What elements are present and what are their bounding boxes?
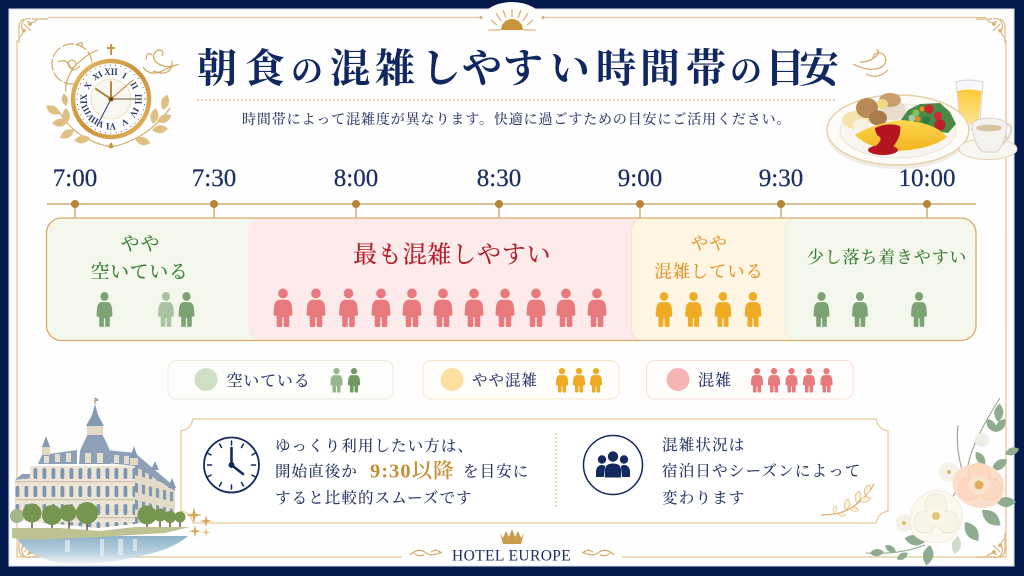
note text: 宿泊日やシーズンによって [662,461,862,480]
legend: crowded [646,360,853,399]
clock numerals [79,67,143,131]
clock numerals: II [128,80,141,91]
advice text: 9:30以降 [370,460,455,482]
building main facade [15,466,135,528]
omelette [855,120,947,151]
clock illustration [44,43,179,148]
callout panel [181,419,888,523]
segment: most crowded [248,218,668,340]
label: slightly empty: やや [120,234,161,255]
title [197,46,839,91]
icon: clock [204,438,259,492]
label: slightly empty [90,234,189,283]
label: slightly crowded: やや [691,234,728,254]
timeline labels: 8:00 [334,165,378,192]
timeline labels: 7:00 [53,165,97,192]
title: の [730,53,762,89]
floral corner [866,398,1021,566]
hotel illustration [10,398,212,564]
title: 朝食 [197,46,285,91]
legend: somewhat crowded [423,360,619,399]
advice text: を目安に [463,462,529,480]
peach rose [953,463,1004,508]
clock numerals: IX [79,94,89,104]
advice text: 開始直後か [275,462,358,480]
title: 混雑しやすい時間帯 [330,46,726,91]
clock numerals: VI [106,121,116,131]
central tower and spire [42,398,176,488]
dormers [44,453,129,464]
timeline labels: 8:30 [477,165,521,192]
title: の [291,53,323,89]
stems [866,398,1000,553]
note text: 混雑状況は [662,436,746,454]
subtitle: 時間帯によって混雑度が異なります。快適に過ごすための目安にご活用ください。 [242,111,791,128]
title: 目安 [765,46,839,91]
clock numerals: XI [91,69,105,82]
advice text [275,437,529,507]
segment: calming down [785,218,976,340]
timeline labels: 9:00 [618,165,662,192]
clock numerals: IV [127,106,141,120]
label: calming down: 少し落ち着きやすい [807,248,967,267]
people: calming down [814,292,927,327]
band outline [46,218,976,340]
clock numerals: VIII [79,102,96,122]
clock numerals: VII [89,114,106,130]
clock numerals: V [119,116,130,129]
legend: somewhat crowded: やや混雑 [472,372,538,390]
congestion band [46,218,976,340]
people: slightly crowded [656,292,761,327]
juice glass [956,80,983,130]
label: slightly crowded: 混雑している [654,262,764,282]
ketchup [868,124,900,155]
icon: guests group [584,436,642,494]
salad [898,103,956,133]
people: most crowded [274,288,606,327]
building right wing [135,463,175,524]
label: most crowded: 最も混雑しやすい [353,242,551,268]
trees [10,502,186,532]
clock numerals: X [82,80,94,91]
plate [827,95,969,169]
timeline labels: 9:30 [759,165,803,192]
riverbank [12,527,190,540]
clock hands [96,80,137,126]
segment: slightly empty 7:00 [46,218,286,340]
bread rolls [842,93,906,131]
note text: 変わります [662,489,746,507]
dotted divider [555,433,557,509]
timeline labels: 10:00 [899,165,955,192]
white blossoms [896,433,989,532]
clock filigree [52,43,179,92]
water reflection [65,539,137,557]
right flourish [853,50,888,76]
leaves [869,403,1021,566]
footer brand [410,529,614,564]
golden sprig [821,484,874,517]
breakfast plate illustration [827,50,1017,169]
roofs [15,434,175,491]
timeline labels: 7:30 [192,165,236,192]
clock numerals: III [133,94,143,105]
clock numerals: I [120,70,129,81]
legend: empty: 空いている [226,372,311,390]
water [16,536,188,564]
legend: empty [168,360,393,399]
label: slightly empty: 空いている [90,261,189,283]
cream rose [910,490,962,543]
clock numerals: XII [104,67,118,77]
saucer and cup [959,118,1017,160]
top sun ornament [480,2,544,38]
legend: crowded: 混雑 [698,372,732,390]
note text [662,436,862,507]
icon: crown [500,529,524,544]
timeline labels [53,165,955,192]
advice text: すると比較的スムーズです [275,489,473,507]
clock face [73,61,149,137]
label: slightly crowded [654,234,764,282]
people: slightly empty [97,292,194,327]
advice text: ゆっくり利用したい方は、 [275,437,474,455]
hotel name: HOTEL EUROPE [452,548,571,564]
clock laurel wreath [44,44,173,148]
segment: slightly crowded [632,218,822,340]
timeline axis [47,200,976,218]
footer ornaments [410,550,614,556]
sparkles [186,507,212,537]
title dotted rule [197,99,837,101]
